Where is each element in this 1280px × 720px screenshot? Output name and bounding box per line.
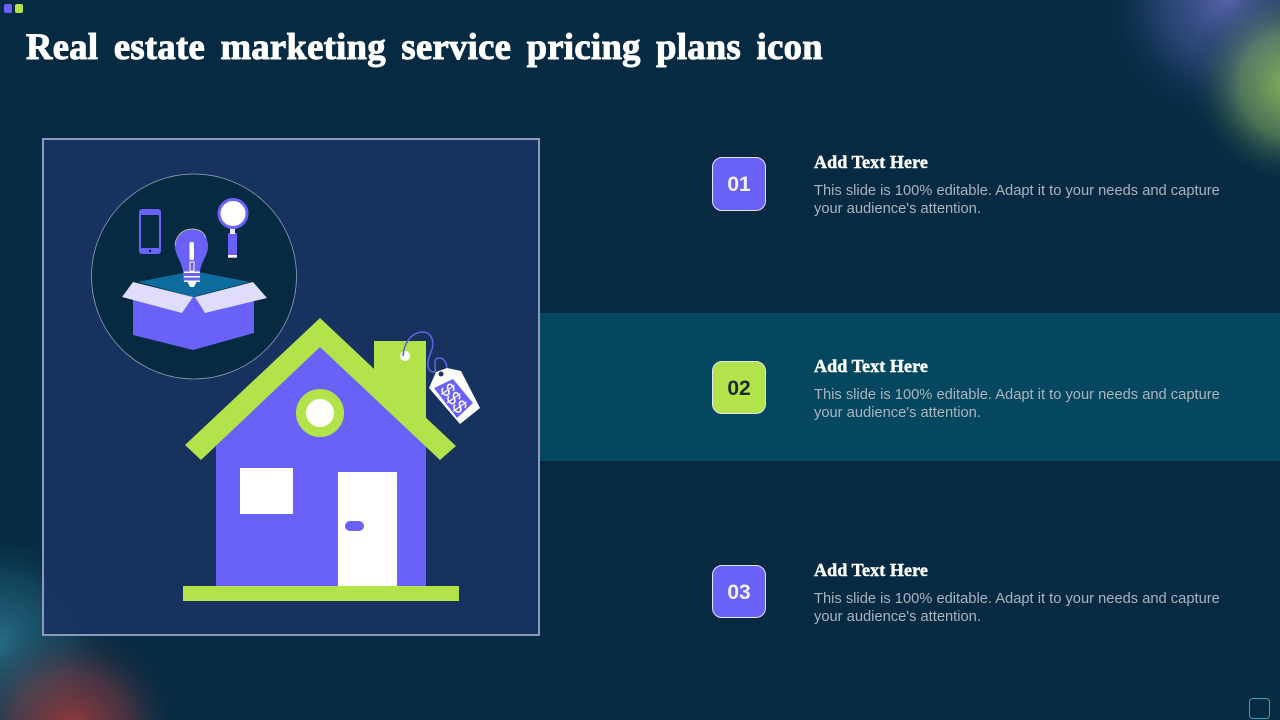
- icon: light bulb: [175, 229, 208, 287]
- text 3: This slide is 100% editable. Adapt it to your needs and capture: [814, 591, 1220, 607]
- price tag: [429, 368, 480, 424]
- number badge 02: 02: [727, 377, 751, 400]
- chimney: [374, 341, 426, 425]
- number badge 03: [712, 565, 766, 618]
- number badge 01: 01: [727, 173, 751, 196]
- corner rounded square: [1249, 698, 1270, 719]
- heading 2: Add Text Here: [814, 356, 928, 376]
- icon: magnifier: [219, 200, 247, 258]
- door: [338, 472, 397, 588]
- tag string: [403, 332, 447, 372]
- illustration panel: [42, 138, 540, 636]
- text 1: [814, 183, 1220, 217]
- roof: [185, 318, 456, 460]
- text 3: your audience's attention.: [814, 609, 981, 625]
- tag hole: [400, 351, 410, 361]
- icon: house with price tag: [183, 318, 480, 601]
- heading 1: Add Text Here: [814, 152, 928, 172]
- heading 3: Add Text Here: [814, 560, 928, 580]
- text 2: your audience's attention.: [814, 405, 981, 421]
- number badge 01: [712, 157, 766, 211]
- ground: [183, 586, 459, 601]
- number badge 03: 03: [727, 581, 751, 604]
- icon circle: box with bulb, phone and magnifier: [92, 174, 296, 379]
- icon: phone: [139, 209, 161, 254]
- square window: [240, 468, 293, 514]
- text 1: This slide is 100% editable. Adapt it to your needs and capture: [814, 183, 1220, 199]
- number badge 02: [712, 361, 766, 414]
- title: Real estate marketing service pricing plans icon: [26, 26, 823, 67]
- house body: [216, 344, 426, 590]
- highlight band: [540, 313, 1280, 461]
- text 1: your audience's attention.: [814, 201, 981, 217]
- text 3: [814, 591, 1220, 625]
- price tag: $$$: [435, 380, 471, 418]
- text 2: This slide is 100% editable. Adapt it to your needs and capture: [814, 387, 1220, 403]
- text 2: [814, 387, 1220, 421]
- round window: [301, 394, 339, 432]
- icon: open box: [122, 271, 267, 350]
- decorative squares: [4, 4, 23, 13]
